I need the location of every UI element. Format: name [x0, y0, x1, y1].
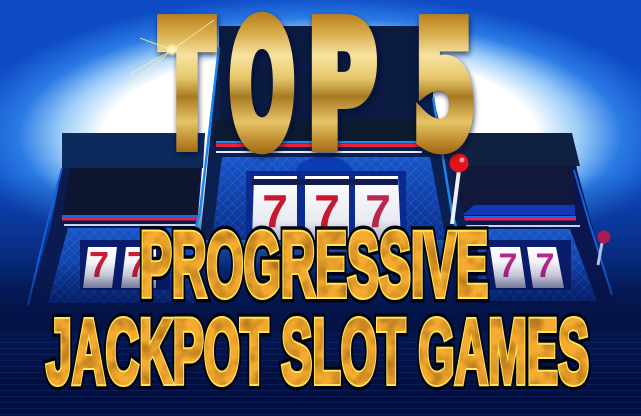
left machine reels: 7 [127, 244, 147, 285]
centre machine reels: 7 [365, 185, 391, 237]
right machine reels: 7 [536, 247, 554, 285]
left machine reels: 7 [89, 244, 109, 285]
machine base fade [0, 262, 641, 332]
centre machine reels: 7 [314, 185, 340, 237]
left machine reels [80, 240, 170, 290]
right machine panel [478, 229, 597, 301]
right machine reels: 7 [499, 247, 517, 285]
centre machine reels: 7 [262, 185, 288, 237]
icon: centre machine lever [450, 154, 468, 224]
right machine reels [486, 240, 571, 290]
title: TOP 5 [160, 0, 477, 189]
icon: right machine lever [598, 230, 610, 265]
centre slot machine [192, 26, 470, 241]
right slot machine [445, 133, 612, 305]
centre machine reels [246, 171, 406, 241]
left slot machine [28, 133, 205, 305]
icon: star glint on title [130, 20, 214, 85]
centre machine panel [212, 157, 446, 240]
left machine panel [48, 228, 200, 303]
heading: PROGRESSIVE [140, 214, 488, 316]
